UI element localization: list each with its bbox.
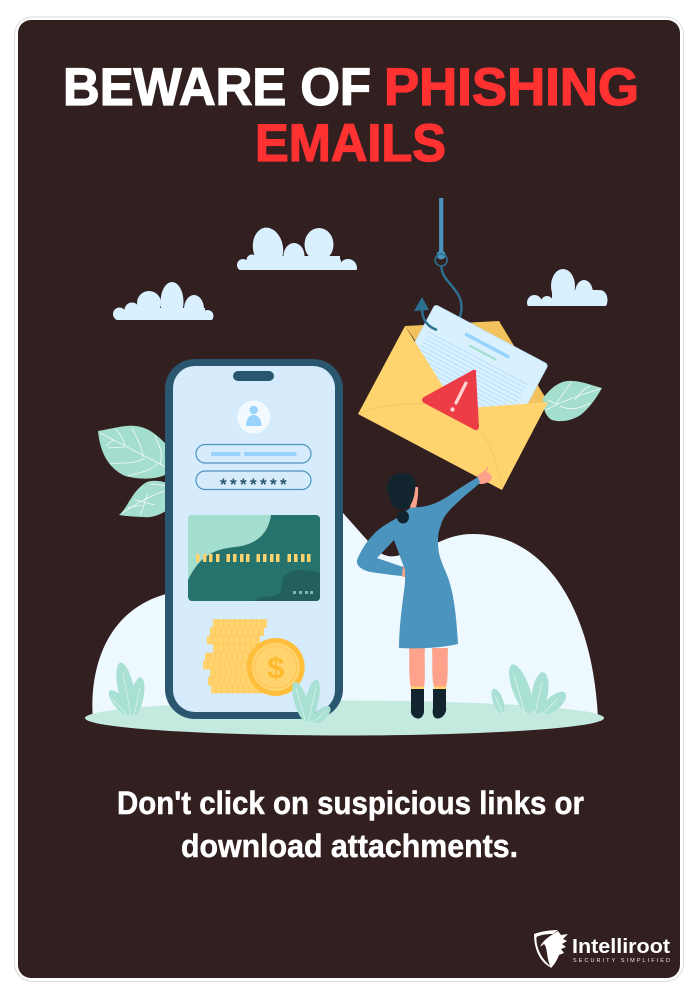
hand bbox=[477, 465, 492, 484]
message text: Don't click on suspicious links or bbox=[117, 785, 584, 821]
boots bbox=[411, 689, 446, 719]
woman bbox=[357, 465, 492, 719]
cloud: top centre bbox=[237, 228, 357, 270]
password field: ******* bbox=[220, 475, 290, 494]
socks bbox=[411, 686, 446, 690]
logo: Intelliroot: SECURITY SIMPLIFIED bbox=[573, 958, 670, 964]
icon: dollar coin bbox=[247, 638, 305, 696]
plant: right bbox=[492, 664, 566, 714]
plant: left bbox=[108, 662, 144, 715]
phone notch bbox=[233, 371, 274, 381]
leaves: left of phone bbox=[98, 426, 170, 517]
phone bbox=[165, 359, 343, 719]
ground ellipse bbox=[85, 700, 604, 736]
plant: front of phone bbox=[292, 680, 331, 723]
icon: warning triangle bbox=[422, 370, 479, 430]
dress bbox=[357, 477, 480, 648]
title: PHISHING bbox=[384, 58, 639, 117]
icon: dollar coin: $ bbox=[267, 650, 284, 685]
neck bbox=[410, 487, 418, 509]
phone screen bbox=[173, 366, 335, 712]
hook barb bbox=[414, 297, 437, 330]
password field bbox=[196, 471, 311, 494]
cloud: left bbox=[113, 282, 214, 323]
message text: download attachments. bbox=[181, 828, 518, 864]
envelope front bbox=[358, 326, 548, 490]
icon: user avatar bbox=[237, 400, 270, 434]
right leaf bbox=[543, 381, 602, 421]
hair bbox=[387, 473, 416, 510]
envelope back bbox=[405, 321, 548, 420]
background blob bbox=[92, 513, 598, 722]
logo: Intelliroot bbox=[534, 930, 670, 968]
username field bbox=[196, 444, 311, 463]
credit card bbox=[188, 515, 320, 601]
phone body bbox=[165, 359, 343, 719]
legs bbox=[409, 648, 448, 688]
hook bbox=[435, 198, 462, 320]
title: EMAILS bbox=[255, 114, 446, 173]
coin stack bbox=[203, 624, 267, 689]
icon: eagle shield bbox=[534, 930, 568, 968]
title bbox=[63, 58, 639, 173]
logo: Intelliroot: Intelliroot bbox=[572, 936, 670, 958]
cloud: right bbox=[527, 269, 608, 310]
title: BEWARE OF bbox=[63, 58, 371, 117]
envelope bbox=[358, 305, 602, 490]
message text bbox=[117, 785, 584, 864]
phishing letter bbox=[388, 305, 548, 453]
